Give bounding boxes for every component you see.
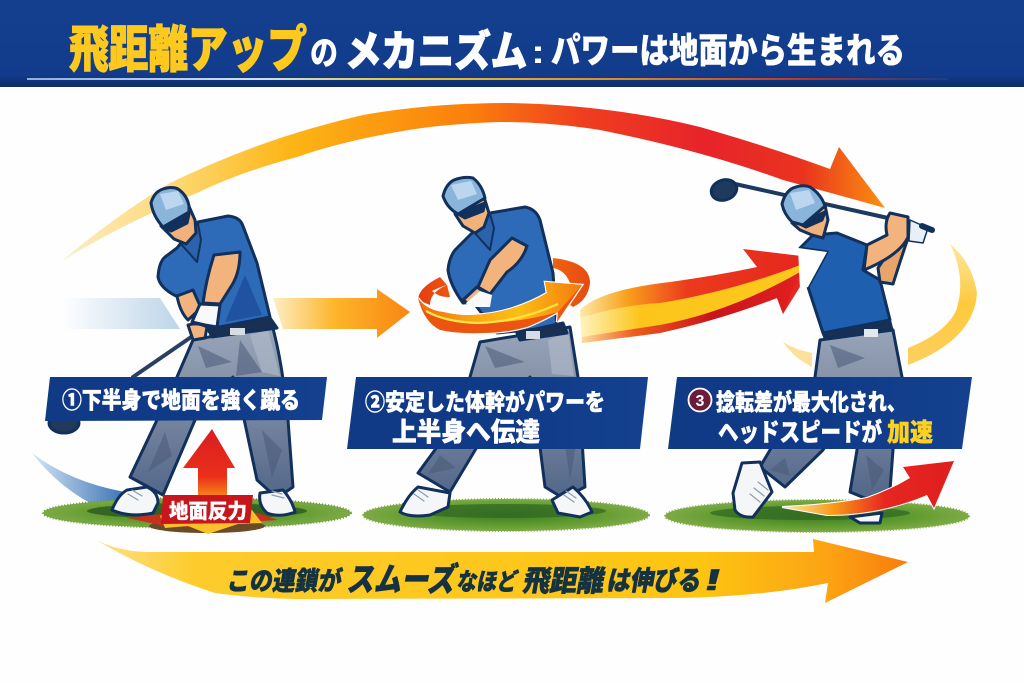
panel: step 3 caption xyxy=(668,377,972,449)
pants folds xyxy=(148,340,282,478)
crescent swooshes: step 3 rotation xyxy=(783,244,977,367)
collar xyxy=(474,214,494,250)
title: パワーは地面から生まれる xyxy=(551,32,905,71)
face xyxy=(161,204,196,244)
visor shade xyxy=(163,214,189,231)
pants folds xyxy=(770,345,884,490)
back shoe xyxy=(733,462,772,517)
white cut in shirt xyxy=(798,248,827,290)
bottom message: スムーズ xyxy=(344,561,460,599)
label: ground reaction force xyxy=(161,495,253,524)
cap xyxy=(151,188,189,227)
rear arm xyxy=(878,238,908,284)
bottom message: 飛距離 xyxy=(521,565,608,598)
arrow: swoosh at left foot xyxy=(32,453,125,512)
belt buckle xyxy=(864,329,878,337)
title: メカニズム xyxy=(345,28,527,75)
panel: step 2 caption: ②安定した体幹がパワーを xyxy=(365,389,605,415)
header band xyxy=(0,0,1024,87)
glove xyxy=(466,291,492,307)
shirt xyxy=(448,207,557,333)
panel: step 3 caption: 加速 xyxy=(887,419,933,447)
rotation ring front with arrowhead xyxy=(418,282,582,333)
bottom message: ! xyxy=(701,564,725,597)
title: の xyxy=(310,35,338,73)
number badge 3: 3 xyxy=(696,393,705,410)
belt buckle xyxy=(230,328,245,335)
grass: step 3 xyxy=(665,500,969,532)
panel: step 1 caption: ①下半身で地面を強く蹴る xyxy=(62,387,300,413)
arrow: step 1 to step 2 xyxy=(273,289,410,338)
shirt xyxy=(800,233,890,333)
arms xyxy=(463,238,527,305)
cap highlight xyxy=(160,191,184,210)
panel: step 2 caption xyxy=(347,377,648,449)
title: 飛距離アップ xyxy=(69,22,307,78)
panel: step 1 caption xyxy=(45,377,327,421)
cap highlight xyxy=(451,181,477,200)
pants xyxy=(130,325,293,498)
title xyxy=(69,22,905,78)
title: : xyxy=(531,34,545,70)
grass: step 1 xyxy=(43,498,351,533)
bottom message: は伸びる xyxy=(605,565,704,596)
shirt xyxy=(158,216,270,329)
starburst: ground impact xyxy=(127,505,278,534)
label: ground reaction force: 地面反力 xyxy=(169,500,247,523)
pants xyxy=(760,330,902,503)
cap highlight xyxy=(790,190,815,210)
front shoe xyxy=(850,513,882,523)
shoe laces xyxy=(414,490,576,502)
club head xyxy=(709,176,739,204)
visor shade xyxy=(458,203,485,218)
pants xyxy=(418,327,585,498)
pants highlight xyxy=(548,332,574,376)
rotation ring back xyxy=(418,258,590,307)
belt xyxy=(208,318,277,337)
belt xyxy=(517,323,567,340)
face xyxy=(455,197,489,233)
visor shade xyxy=(800,212,825,227)
club grip xyxy=(922,226,932,230)
cap xyxy=(782,186,825,225)
arrow: pale incoming bar xyxy=(60,298,180,329)
bottom message: この連鎖が xyxy=(225,566,344,596)
shoe laces xyxy=(750,482,768,502)
cap xyxy=(443,177,485,214)
glove xyxy=(192,304,220,327)
grass: step 2 xyxy=(363,499,649,531)
shirt shading xyxy=(225,275,262,322)
shoes xyxy=(400,487,592,517)
golfer: step 1 xyxy=(49,188,295,515)
arrow: bottom chain banner xyxy=(96,539,908,603)
collar xyxy=(181,224,201,262)
panel: step 2 caption: 上半身へ伝達 xyxy=(392,417,540,447)
arms xyxy=(177,252,240,320)
glove xyxy=(909,220,928,243)
club shaft xyxy=(735,184,932,230)
belt xyxy=(823,322,892,338)
arrow: small red foot arrow xyxy=(782,461,954,515)
shoe laces xyxy=(128,490,284,500)
front arm xyxy=(864,213,908,270)
panel: step 3 caption: 捻転差が最大化され、 xyxy=(716,389,906,415)
club xyxy=(133,333,197,377)
pants highlight xyxy=(250,330,280,376)
golfer: step 2 xyxy=(400,177,592,517)
arrow: large arc over the golfers xyxy=(62,103,885,261)
face xyxy=(792,205,828,238)
hand xyxy=(188,324,207,340)
bottom message xyxy=(225,561,725,599)
panel: step 3 caption: ヘッドスピードが xyxy=(718,418,882,447)
bottom message: なほど xyxy=(455,569,520,596)
shoes xyxy=(112,487,295,515)
pants folds xyxy=(428,346,577,480)
arrow: step 2 to step 3 xyxy=(580,249,818,343)
belt buckle xyxy=(526,331,540,339)
club head xyxy=(49,413,79,433)
number badge 3 xyxy=(688,388,712,412)
golfer: step 3 xyxy=(709,176,932,523)
arrow: ground reaction upward xyxy=(183,429,235,497)
